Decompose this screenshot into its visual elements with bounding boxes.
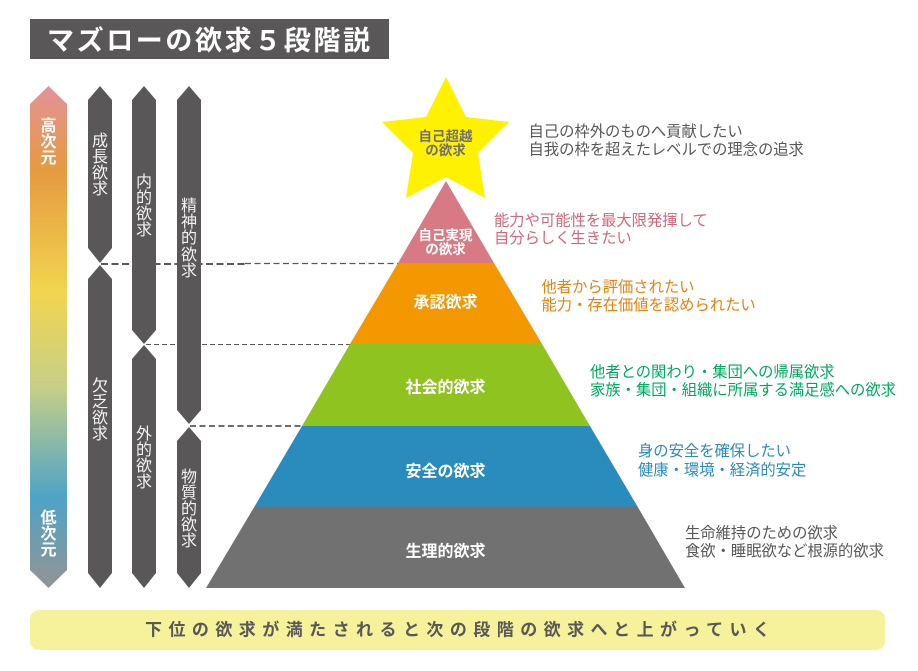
description: social	[590, 363, 896, 399]
bar: spiritual needs: 求	[181, 262, 197, 280]
bar: intrinsic needs: 欲	[136, 205, 152, 223]
bar: spiritual needs: 神	[181, 213, 197, 231]
gradient arrow: high to low dimension: 次	[40, 133, 57, 151]
description: self-actualization: 能力や可能性を最大限発揮して	[494, 212, 708, 230]
bar: deficiency needs	[88, 265, 112, 588]
bar: extrinsic needs: 外	[136, 425, 152, 443]
bottom banner: 下位の欲求が満たされると次の段階の欲求へと上がっていく	[145, 620, 776, 640]
bar: extrinsic needs: 的	[136, 441, 152, 459]
bar: material needs: 求	[181, 532, 197, 550]
bar: intrinsic needs: 内	[136, 173, 152, 191]
dashed connector lines	[101, 264, 400, 426]
bar: material needs: 質	[181, 484, 197, 502]
bar: intrinsic needs: 的	[136, 189, 152, 207]
star: self-transcendence	[382, 77, 509, 198]
description: physiological: 食欲・睡眠欲など根源的欲求	[685, 543, 884, 560]
pyramid tier: safety	[254, 426, 638, 506]
bar: deficiency needs: 乏	[92, 393, 108, 411]
description: social: 家族・集団・組織に所属する満足感への欲求	[590, 382, 896, 399]
pyramid tier: self-actualization: の欲求	[425, 241, 466, 257]
gradient arrow: high to low dimension	[30, 86, 67, 588]
bar: spiritual needs: 欲	[181, 246, 197, 264]
bar: material needs: 的	[181, 500, 197, 518]
pyramid tier: social: 社会的欲求	[405, 378, 486, 396]
bar: deficiency needs: 欲	[92, 409, 108, 427]
pyramid tier: physiological: 生理的欲求	[405, 542, 486, 560]
pyramid tier: physiological	[206, 506, 685, 588]
pyramid tier: esteem: 承認欲求	[413, 292, 478, 312]
gradient arrow: high to low dimension: 元	[40, 150, 57, 167]
bar: growth needs	[88, 86, 112, 263]
description: physiological: 生命維持のための欲求	[685, 525, 838, 542]
description: safety	[638, 443, 806, 479]
bar: extrinsic needs: 欲	[136, 457, 152, 475]
description: self-actualization: 自分らしく生きたい	[494, 230, 632, 247]
description: self-actualization	[494, 212, 708, 247]
pyramid tier: social	[302, 344, 590, 426]
bar: intrinsic needs: 求	[136, 221, 152, 239]
bar: extrinsic needs	[132, 345, 156, 588]
description: social: 他者との関わり・集団への帰属欲求	[590, 363, 835, 381]
bar: extrinsic needs: 求	[136, 473, 152, 491]
star: self-transcendence: 自己超越	[418, 128, 473, 144]
description: safety: 身の安全を確保したい	[638, 443, 791, 460]
bar: growth needs: 長	[92, 148, 108, 166]
bar: deficiency needs: 求	[92, 425, 108, 443]
description: self-transcendence	[528, 124, 804, 158]
description: esteem: 能力・存在価値を認められたい	[542, 297, 756, 314]
description: self-transcendence: 自己の枠外のものへ貢献したい	[528, 124, 743, 140]
gradient arrow: high to low dimension: 次	[40, 525, 57, 543]
description: physiological	[685, 525, 884, 560]
bar: growth needs: 求	[92, 180, 108, 198]
bar: growth needs: 欲	[92, 164, 108, 182]
description: esteem: 他者から評価されたい	[542, 279, 694, 296]
bar: material needs	[177, 427, 201, 588]
bar: growth needs: 成	[92, 132, 108, 150]
description: esteem	[542, 279, 756, 314]
bottom banner	[30, 610, 885, 650]
bar: spiritual needs: 的	[181, 229, 197, 247]
gradient arrow: high to low dimension: 高	[40, 116, 57, 135]
bar: material needs: 欲	[181, 516, 197, 534]
gradient arrow: high to low dimension: 元	[40, 542, 57, 559]
bar: spiritual needs: 精	[181, 197, 197, 215]
pyramid tier: self-actualization: 自己実現	[418, 227, 473, 243]
pyramid tier: self-actualization	[398, 181, 494, 263]
bar: spiritual needs	[177, 86, 201, 424]
description: safety: 健康・環境・経済的安定	[638, 462, 806, 479]
pyramid tier: safety: 安全の欲求	[405, 462, 486, 480]
pyramid tier: esteem	[350, 263, 542, 344]
description: self-transcendence: 自我の枠を超えたレベルでの理念の追求	[528, 142, 804, 158]
title: マズローの欲求５段階説	[47, 25, 373, 56]
star: self-transcendence: の欲求	[425, 142, 466, 158]
gradient arrow: high to low dimension: 低	[40, 509, 57, 527]
bar: deficiency needs: 欠	[92, 377, 108, 395]
bar: intrinsic needs	[132, 86, 156, 344]
bar: material needs: 物	[181, 468, 197, 486]
title	[30, 19, 389, 59]
